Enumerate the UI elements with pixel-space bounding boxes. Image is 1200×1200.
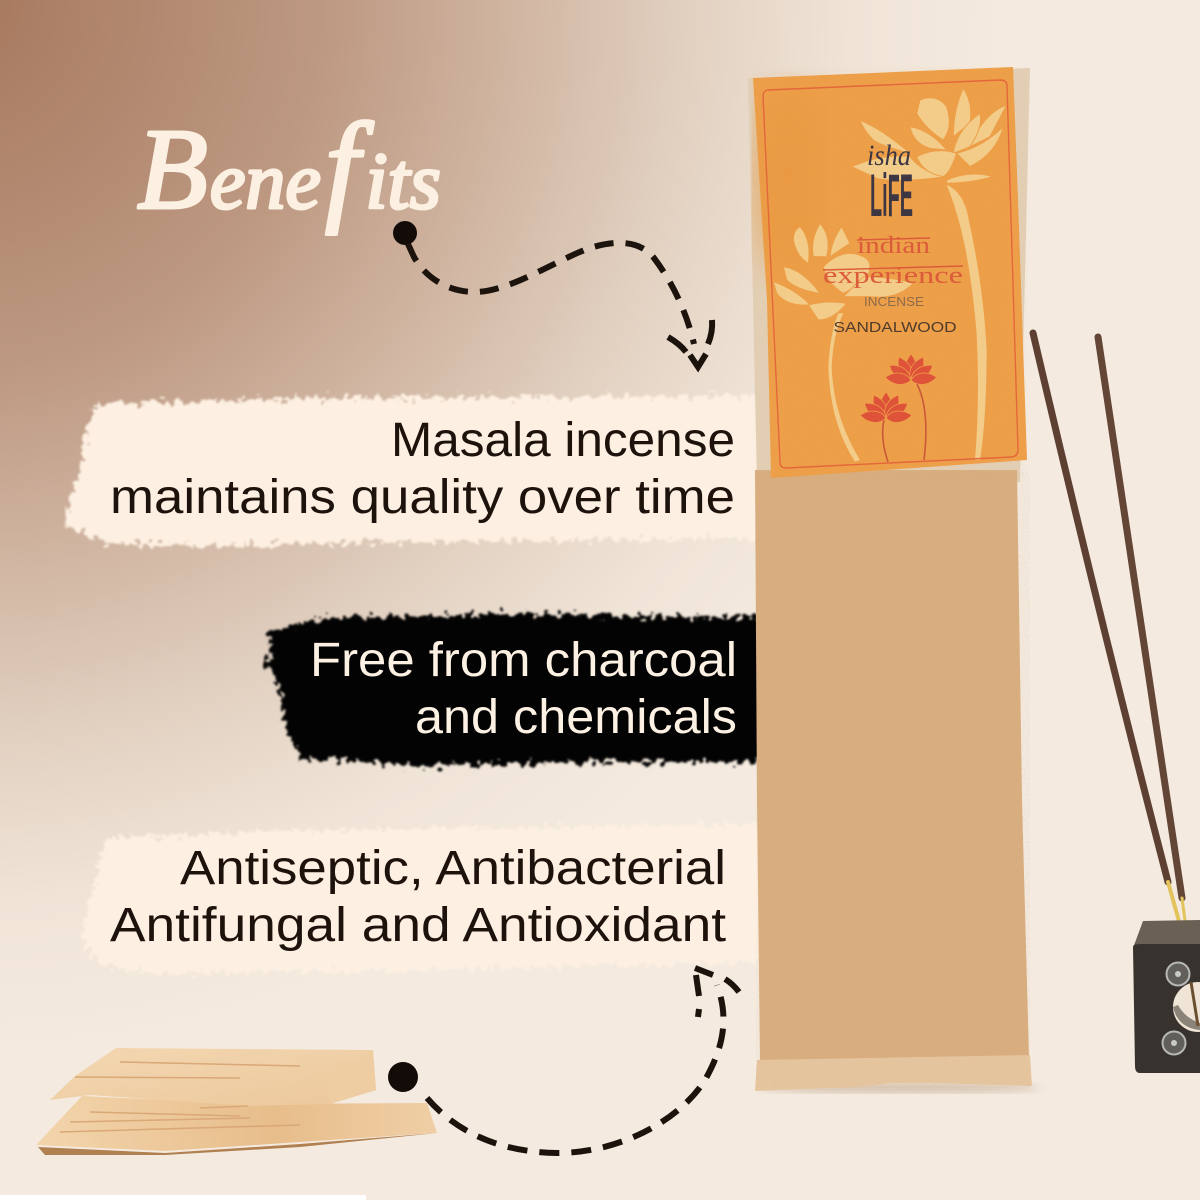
text: antiseptic benefit: Antifungal and Antioxidant bbox=[110, 899, 726, 952]
text: charcoal benefit bbox=[310, 634, 737, 744]
text: antiseptic benefit bbox=[110, 842, 726, 952]
arrow: dashed from heading to product bbox=[393, 221, 712, 367]
panel: cream brush stroke, antiseptic bbox=[82, 824, 770, 974]
product: kraft paper bag bbox=[748, 68, 1032, 1091]
heading: Benefits: Benefits bbox=[137, 98, 441, 235]
sandalwood pieces bbox=[36, 1048, 437, 1155]
label title: indian bbox=[857, 233, 930, 259]
product label: orange bbox=[753, 67, 1027, 478]
text: quality benefit: Masala incense bbox=[391, 414, 735, 467]
text: charcoal benefit: Free from charcoal bbox=[310, 634, 737, 687]
panel: cream brush stroke, quality bbox=[65, 396, 770, 546]
large pale lotus bbox=[852, 88, 1007, 460]
logo: isha life: isha bbox=[867, 139, 911, 172]
white strip at bottom edge bbox=[0, 1195, 366, 1200]
text: charcoal benefit: and chemicals bbox=[415, 691, 737, 744]
panel: black brush stroke, free from charcoal bbox=[268, 614, 780, 766]
arrow: dashed from sandalwood to benefit bbox=[388, 968, 739, 1153]
label: incense: INCENSE bbox=[864, 295, 924, 309]
shadow under product bbox=[760, 1083, 1040, 1093]
product label: orange: LiFE bbox=[870, 162, 913, 229]
text: quality benefit bbox=[110, 414, 735, 524]
incense sticks bbox=[1033, 333, 1186, 932]
text: quality benefit: maintains quality over time bbox=[110, 471, 735, 524]
logo: isha life bbox=[867, 139, 913, 229]
red border bbox=[763, 80, 1018, 468]
red lotuses bbox=[860, 354, 937, 462]
label title: experience bbox=[823, 263, 963, 289]
small pale lotus bbox=[773, 223, 913, 462]
label title bbox=[823, 233, 963, 289]
label: sandalwood: SANDALWOOD bbox=[834, 319, 957, 336]
text: antiseptic benefit: Antiseptic, Antibacterial bbox=[180, 842, 726, 895]
incense holder block bbox=[1133, 920, 1200, 1073]
